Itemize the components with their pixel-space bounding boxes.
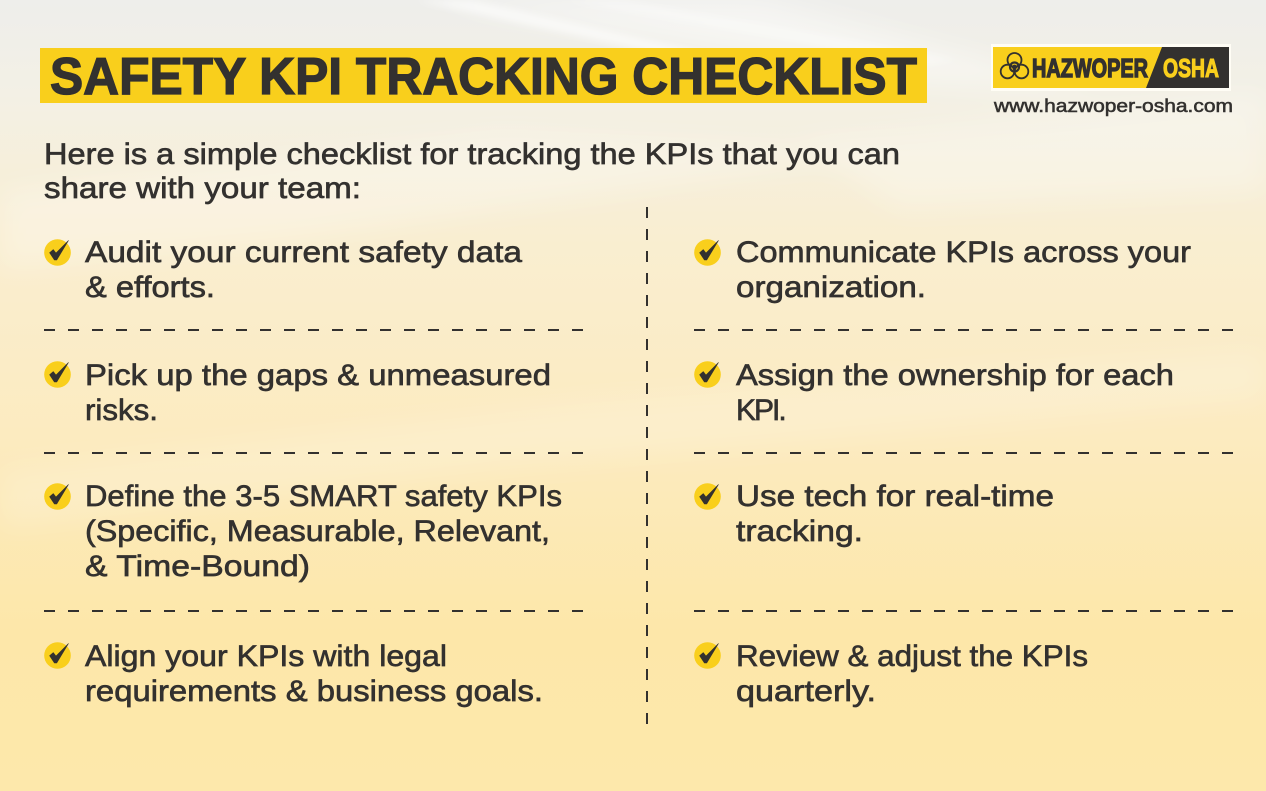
item: assign ownership <box>694 359 1174 427</box>
logo: Hazwoper OSHA: OSHA <box>1163 53 1219 83</box>
vertical divider <box>646 207 648 724</box>
item: pick up gaps: Pick up the gaps & unmeasured <box>85 359 551 392</box>
logo: Hazwoper OSHA <box>991 44 1231 91</box>
item: define SMART KPIs: (Specific, Measurable, Relevant, <box>85 515 550 548</box>
item: review KPIs <box>694 640 1088 708</box>
item: communicate KPIs: organization. <box>736 271 926 304</box>
item: review KPIs: quarterly. <box>736 675 876 708</box>
title: SAFETY KPI TRACKING CHECKLIST <box>50 48 917 106</box>
logo: Hazwoper OSHA: HAZWOPER <box>1032 53 1148 83</box>
icon: biohazard <box>1001 53 1028 78</box>
left column checklist <box>44 236 583 708</box>
item: use tech: Use tech for real-time <box>736 480 1054 513</box>
item: assign ownership: Assign the ownership for each <box>736 359 1174 392</box>
right column checklist <box>694 236 1233 708</box>
item: define SMART KPIs <box>44 480 562 583</box>
item: define SMART KPIs: Define the 3-5 SMART safety KPIs <box>85 480 562 513</box>
item: align KPIs <box>44 640 543 708</box>
item: use tech: tracking. <box>736 515 863 548</box>
website url: www.hazwoper-osha.com <box>993 95 1233 116</box>
item: communicate KPIs: Communicate KPIs across your <box>736 236 1191 269</box>
item: pick up gaps <box>44 359 551 427</box>
item: use tech <box>694 480 1054 548</box>
item: audit data: & efforts. <box>85 271 215 304</box>
item: pick up gaps: risks. <box>85 394 158 427</box>
item: align KPIs: Align your KPIs with legal <box>85 640 447 673</box>
item: define SMART KPIs: & Time-Bound) <box>85 550 310 583</box>
intro text: Here is a simple checklist for tracking the KPIs that you can <box>44 138 900 171</box>
intro text <box>44 138 900 205</box>
item: communicate KPIs <box>694 236 1191 304</box>
intro text: share with your team: <box>44 172 361 205</box>
item: align KPIs: requirements & business goals. <box>85 675 543 708</box>
item: audit data: Audit your current safety data <box>85 236 522 269</box>
item: audit data <box>44 236 522 304</box>
item: review KPIs: Review & adjust the KPIs <box>736 640 1088 673</box>
item: assign ownership: KPI. <box>736 394 785 427</box>
